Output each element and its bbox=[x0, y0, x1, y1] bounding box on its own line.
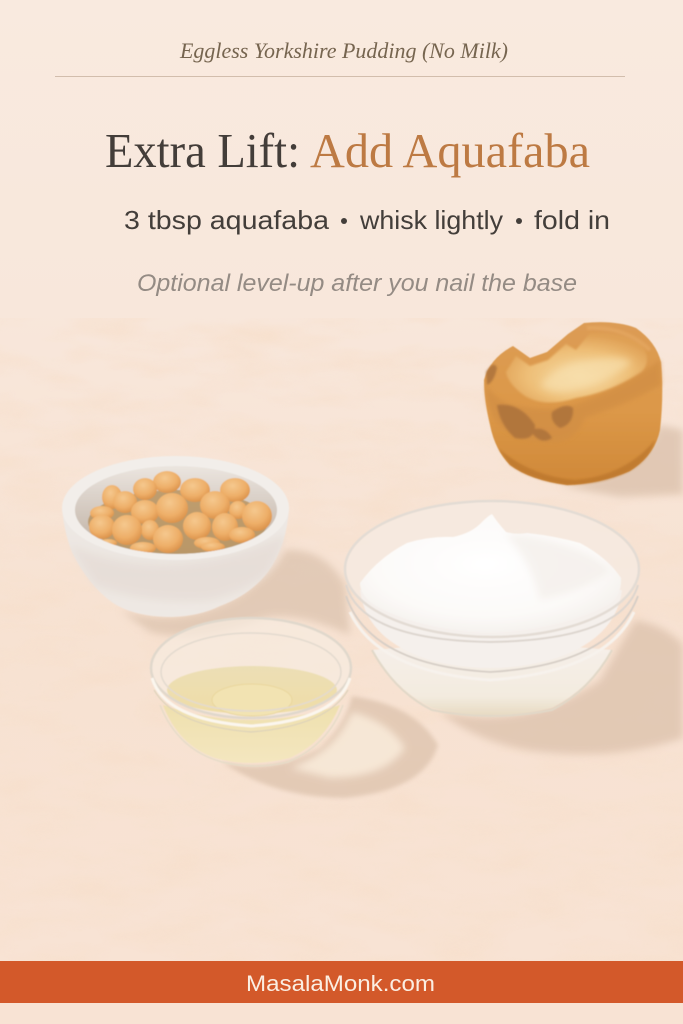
bowl outline bbox=[160, 705, 343, 766]
liquid body bbox=[372, 640, 612, 715]
oil bowl caustic bbox=[290, 712, 405, 778]
chickpea bowl shadow bbox=[120, 550, 350, 636]
recipe line: 3 tbsp aquafaba bbox=[124, 205, 330, 235]
foam top bbox=[360, 514, 621, 633]
recipe line: whisk lightly bbox=[359, 205, 503, 235]
oil surface bbox=[167, 666, 337, 714]
footer band bbox=[0, 961, 683, 1003]
surface shadows bbox=[120, 425, 683, 798]
footer text: MasalaMonk.com bbox=[246, 971, 435, 996]
yorkshire pudding bbox=[484, 322, 662, 485]
foam bowl shadow bbox=[440, 620, 683, 754]
recipe line bbox=[124, 205, 610, 235]
chickpeas bbox=[88, 471, 272, 554]
title: Extra Lift: bbox=[105, 123, 300, 178]
pudding lower crust bbox=[498, 440, 655, 485]
chickpea bed shadow bbox=[88, 490, 268, 554]
oil glass bowl bbox=[151, 618, 351, 766]
chickpea bowl bbox=[62, 456, 289, 617]
foam crest shade bbox=[505, 534, 610, 600]
bowl interior bbox=[75, 466, 277, 554]
foam band bbox=[360, 590, 622, 668]
tagline: Optional level-up after you nail the base bbox=[137, 270, 577, 297]
pudding front rim bbox=[486, 360, 661, 442]
glass rim back bbox=[345, 501, 639, 637]
glass rim bbox=[151, 618, 351, 718]
aquafaba foam glass bowl bbox=[345, 501, 639, 716]
top label: Eggless Yorkshire Pudding (No Milk) bbox=[179, 38, 508, 63]
pudding rim highlight bbox=[587, 328, 650, 350]
oil highlight bbox=[212, 684, 292, 716]
glass interior bbox=[346, 502, 638, 638]
glass rim front bbox=[346, 585, 638, 642]
oil bowl shadow bbox=[222, 696, 438, 798]
pudding hollow bbox=[506, 333, 647, 403]
paper texture bbox=[0, 318, 683, 961]
glass inner rim bbox=[161, 633, 341, 711]
bowl base bbox=[372, 650, 612, 716]
pudding browned spots bbox=[486, 365, 573, 441]
recipe line: fold in bbox=[534, 205, 610, 235]
oil glass interior bbox=[152, 618, 350, 718]
title accent: Add Aquafaba bbox=[310, 123, 590, 178]
oil lower fill bbox=[163, 705, 340, 763]
pudding body bbox=[484, 322, 662, 485]
divider bbox=[55, 76, 625, 77]
pudding shadow bbox=[560, 425, 683, 497]
bowl body bbox=[62, 508, 289, 617]
rim bbox=[62, 456, 289, 560]
bowl shade bbox=[70, 535, 285, 601]
pudding hollow light bbox=[540, 358, 632, 392]
glass front band bbox=[152, 678, 350, 726]
